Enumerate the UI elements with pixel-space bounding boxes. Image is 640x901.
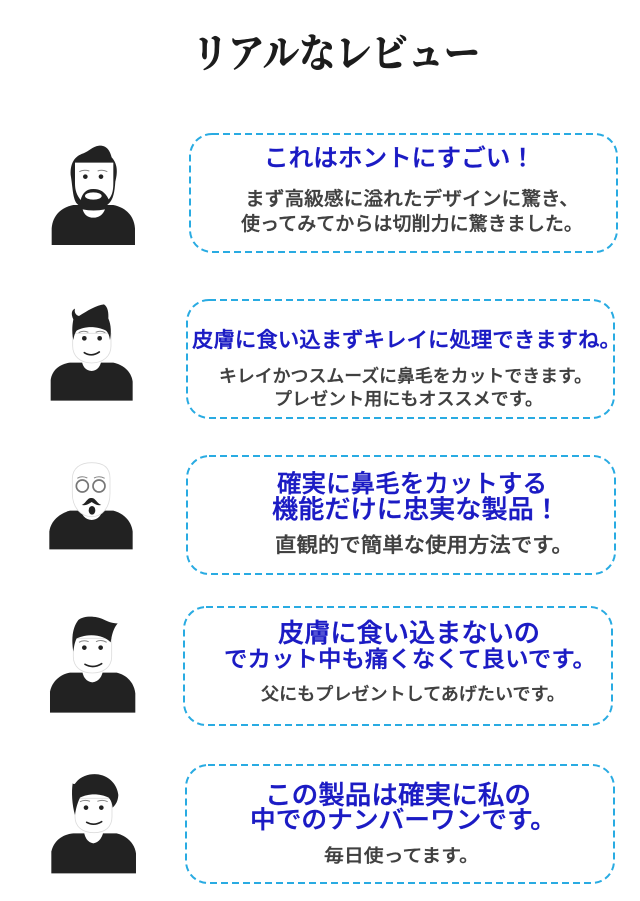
heading: review 3: 確実に鼻毛をカットする [277, 470, 547, 498]
text: review 2 body [219, 366, 592, 409]
text: review 5 body: 毎日使ってます。 [324, 846, 479, 866]
text: review 1 body [241, 187, 583, 235]
text: review 4 body: 父にもプレゼントしてあげたいです。 [261, 684, 565, 704]
text: review 2 body: キレイかつスムーズに鼻毛をカットできます。 [219, 366, 592, 386]
review row 5 [51, 765, 614, 883]
icon: man with thick hair avatar [51, 774, 136, 873]
heading: review 4: 皮膚に食い込まないの [278, 618, 540, 648]
panel: review 4 [184, 607, 612, 725]
icon: bald man with glasses avatar [49, 463, 133, 549]
heading: review 5: 中でのナンバーワンです。 [250, 806, 556, 834]
heading: review 4: でカット中も痛くなくて良いです。 [224, 647, 596, 672]
heading: review 5: この製品は確実に私の [265, 780, 531, 810]
title: リアルなレビュー [192, 31, 480, 76]
text: review 1 body: 使ってみてからは切削力に驚きました。 [241, 213, 583, 235]
heading: review 3 [272, 470, 560, 524]
panel: review 2 [187, 300, 621, 418]
text: review 1 body: まず高級感に溢れたデザインに驚き、 [245, 187, 579, 210]
heading: review 4 [224, 618, 596, 672]
heading: review 5 [250, 780, 556, 834]
heading: review 1: これはホントにすごい！ [264, 145, 535, 172]
heading: review 2: 皮膚に食い込まずキレイに処理できますね。 [192, 329, 621, 352]
icon: man with swept hair avatar [50, 617, 135, 713]
review row 4 [50, 607, 612, 725]
icon: man with quiff avatar [51, 304, 133, 401]
text: review 3 body: 直観的で簡単な使用方法です。 [275, 534, 573, 557]
icon: bearded man avatar [52, 146, 135, 245]
panel: review 1 [190, 134, 617, 252]
panel: review 3 [187, 456, 615, 574]
review row 3 [49, 456, 615, 574]
text: review 2 body: プレゼント用にもオススメです。 [274, 389, 543, 409]
review row 2 [51, 300, 621, 418]
panel: review 5 [186, 765, 614, 883]
heading: review 3: 機能だけに忠実な製品！ [272, 496, 560, 524]
review row 1 [52, 134, 617, 252]
